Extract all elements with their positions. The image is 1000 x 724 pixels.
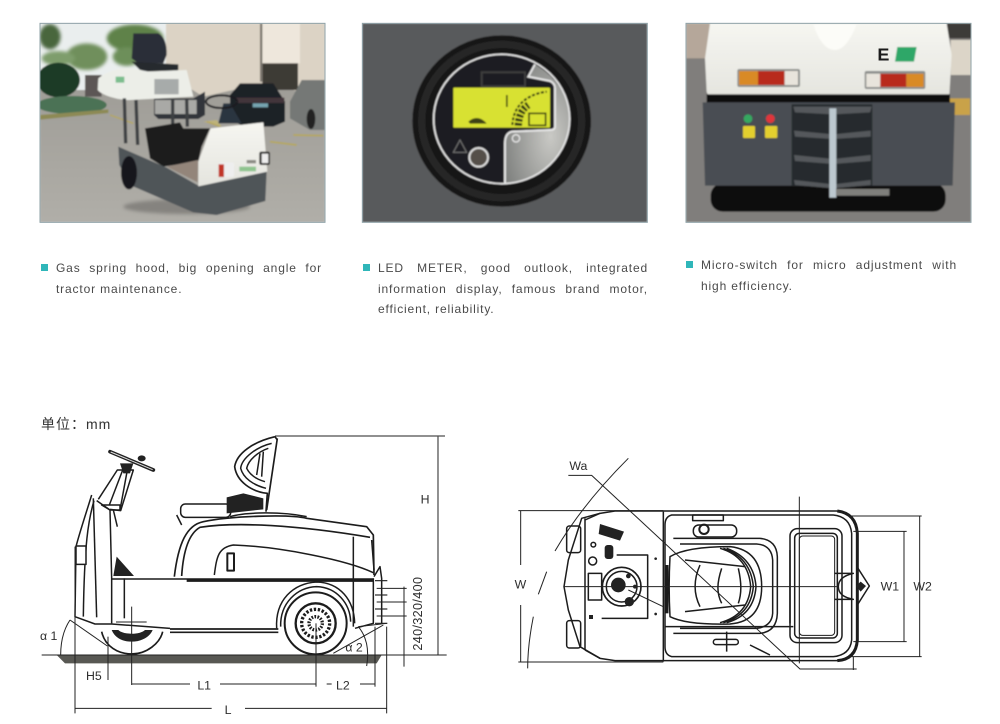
caption 3 text: high efficiency. [701, 279, 793, 293]
caption 2 text: efficient, reliability. [378, 302, 494, 316]
caption 3 text: Micro-switch for micro adjustment with [701, 258, 957, 272]
ground hatch [57, 655, 382, 663]
caption 3 text [701, 258, 957, 293]
photo: rear of tractor with micro-switches [686, 23, 972, 222]
side view technical drawing [40, 436, 447, 717]
steering wheel [110, 452, 153, 470]
photo: LED meter [362, 23, 647, 222]
caption 1 bullet [41, 264, 48, 271]
dimension labels: H [421, 492, 430, 506]
top view technical drawing: W [515, 578, 527, 592]
side view technical drawing: α 2 [345, 641, 363, 655]
dimension lines [42, 436, 447, 713]
side view technical drawing: L1 [197, 678, 211, 692]
photo: tractor with opened hood [37, 23, 325, 222]
unit label: 单位：mm [41, 416, 111, 432]
caption 3 bullet [686, 261, 693, 268]
side view technical drawing: α 1 [40, 629, 58, 643]
side view technical drawing: L2 [336, 678, 350, 692]
caption 2 text: information display, famous brand motor, [378, 282, 648, 296]
caption 1 text [56, 261, 322, 296]
vehicle outline: side [75, 437, 382, 654]
dimension lines [518, 458, 922, 670]
caption 2 text [378, 261, 648, 316]
side view technical drawing: H5 [86, 669, 102, 683]
caption 2 text: LED METER, good outlook, integrated [378, 261, 648, 275]
logo text on hood: E [877, 45, 889, 65]
top view technical drawing: W1 [881, 580, 899, 594]
caption 1 text: Gas spring hood, big opening angle for [56, 261, 322, 275]
side view technical drawing: L [225, 703, 232, 717]
dimension labels: Wa [569, 459, 588, 473]
side view technical drawing: 240/320/400 [411, 577, 425, 651]
caption 2 bullet [363, 264, 370, 271]
top view technical drawing: W2 [913, 580, 932, 594]
caption 1 text: tractor maintenance. [56, 282, 182, 296]
vehicle outline: top [564, 511, 869, 662]
top view technical drawing [515, 458, 932, 670]
